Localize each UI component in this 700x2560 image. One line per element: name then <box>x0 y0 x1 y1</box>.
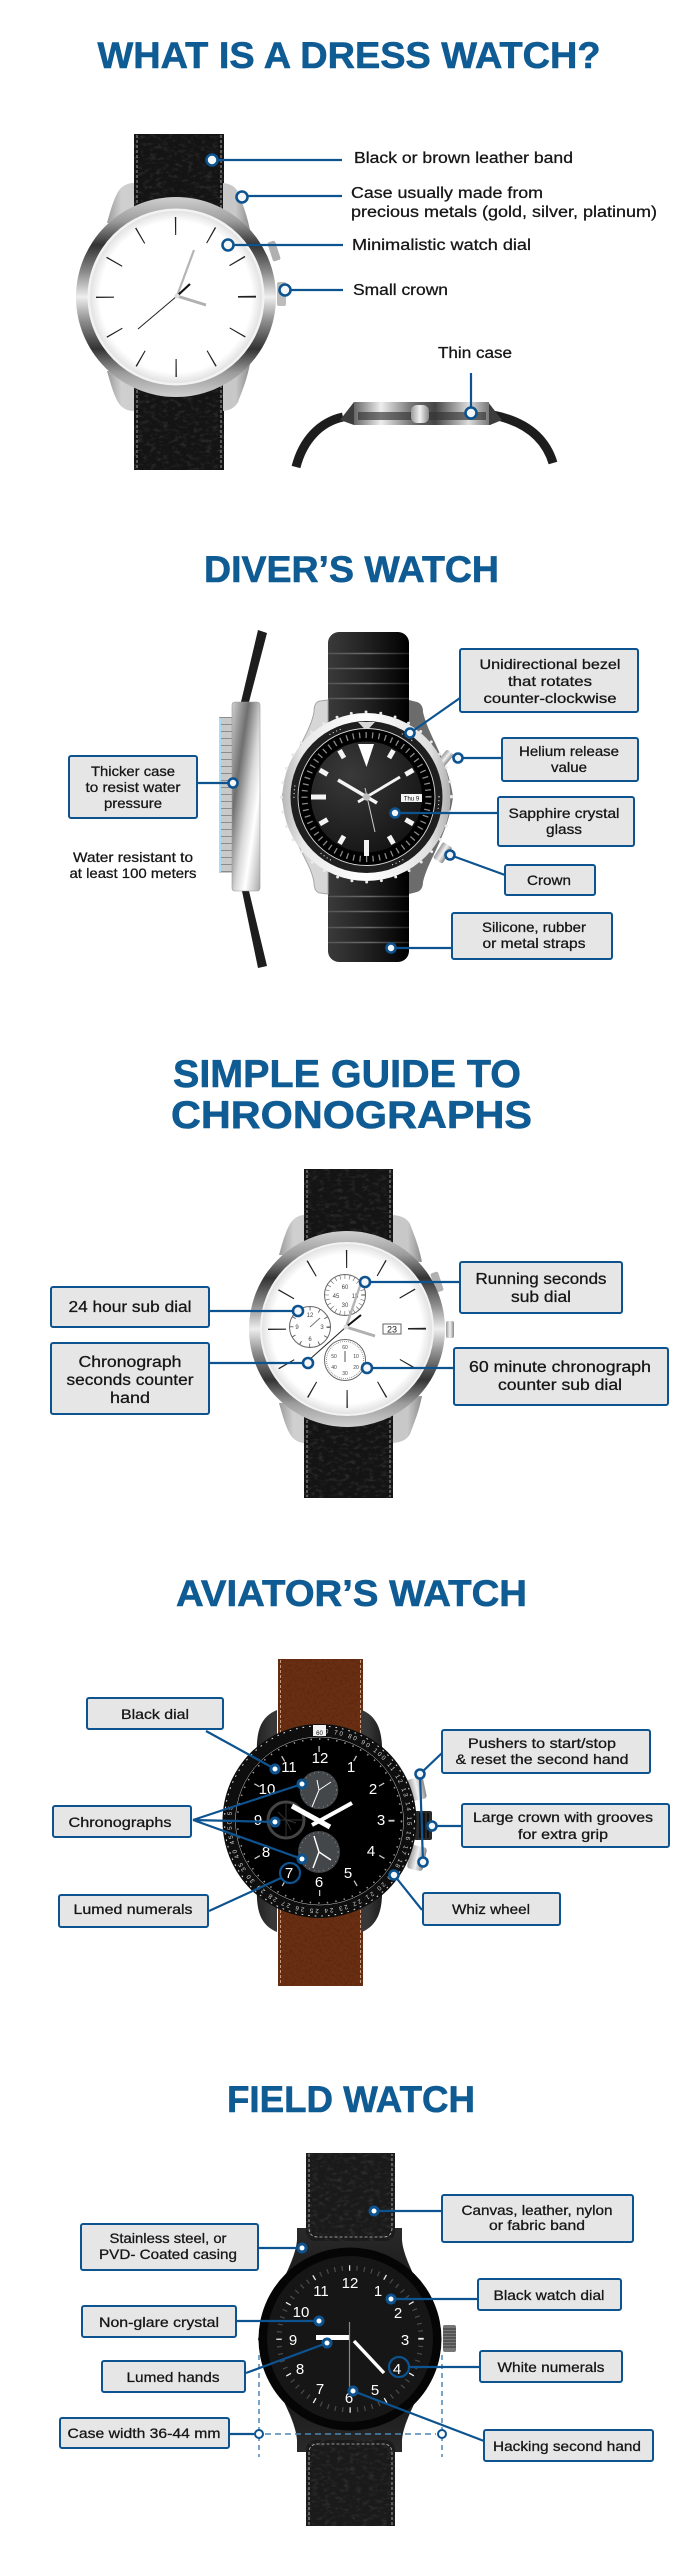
callout: running seconds sub dial: sub dial <box>511 1289 571 1306</box>
callout: 60 minute chronograph counter <box>362 1348 668 1405</box>
callout: unidirectional bezel <box>406 649 638 738</box>
illustration: dress watch side profile <box>296 402 553 467</box>
illustration: aviator watch: 3 <box>377 1812 385 1829</box>
panel: aviator's watch <box>52 1573 670 1986</box>
illustration: chronograph watch <box>249 1169 454 1498</box>
callout: 24 hour sub dial <box>51 1287 303 1327</box>
text: water resistance note: at least 100 meters <box>70 865 196 881</box>
illustration: aviator watch: 2 <box>369 1781 377 1798</box>
illustration: aviator watch: 6 <box>315 1874 323 1891</box>
callout: helium release <box>454 738 638 781</box>
callout: chronographs <box>53 1780 306 1863</box>
callout: unidirectional bezel: Unidirectional bezel <box>480 656 620 672</box>
illustration: chronograph watch: 45 <box>333 1294 340 1300</box>
callout: casing: Stainless steel, or <box>110 2230 227 2246</box>
panel: field watch <box>60 2079 653 2526</box>
illustration: aviator watch: 9 <box>254 1812 262 1829</box>
heading: simple guide to chronographs: SIMPLE GUIDE TO <box>173 1053 521 1096</box>
callout: running seconds sub dial <box>360 1262 622 1313</box>
illustration: chronograph watch: 15 <box>352 1294 359 1300</box>
illustration: dress watch front <box>76 134 286 470</box>
illustration: aviator watch: 7 <box>285 1865 293 1882</box>
callout: pushers <box>416 1730 650 1866</box>
measurement: case width guides <box>255 2355 446 2457</box>
illustration: field watch: 9 <box>289 2332 297 2349</box>
illustration: field watch: 10 <box>293 2304 309 2321</box>
callout: pushers: Pushers to start/stop <box>468 1735 616 1751</box>
illustration: aviator watch: 11 <box>281 1759 297 1776</box>
illustration: aviator watch: 60 70 80 90 100 11 12 13 14 15 16 17 18 19 20 21 22 23 24 25 26 27 28 29 30 35 40 45 50 55 <box>227 1729 412 1914</box>
illustration: chronograph watch: 20 <box>353 1365 359 1371</box>
callout: sapphire crystal <box>390 797 634 846</box>
illustration: field watch: 8 <box>296 2361 304 2378</box>
callout: whiz wheel <box>390 1870 560 1925</box>
callout: thin case: Thin case <box>438 345 512 362</box>
callout: whiz wheel: Whiz wheel <box>452 1901 530 1917</box>
callout: band material: or fabric band <box>489 2217 585 2233</box>
panel: dress watch <box>76 35 657 470</box>
illustration: chronograph watch: 10 <box>353 1354 359 1360</box>
callout: lumed hands: Lumed hands <box>126 2369 220 2385</box>
illustration: chronograph watch: 40 <box>331 1365 337 1371</box>
callout: unidirectional bezel: counter-clockwise <box>484 690 617 706</box>
illustration: field watch: 2 <box>394 2305 402 2322</box>
illustration: aviator watch: 4 <box>367 1843 375 1860</box>
callout: crown <box>446 850 595 895</box>
callout: case metals <box>236 185 657 221</box>
callout: white numerals <box>389 2351 622 2382</box>
callout: chronographs: Chronographs <box>68 1814 172 1830</box>
illustration: chronograph watch: 50 <box>331 1354 337 1360</box>
illustration: aviator watch: 8 <box>262 1844 270 1861</box>
callout: large crown <box>428 1804 669 1847</box>
callout: large crown: Large crown with grooves <box>473 1809 653 1825</box>
callout: hacking second hand <box>349 2387 653 2461</box>
callout: thicker case: Thicker case <box>91 763 175 779</box>
illustration: chronograph watch: 9 <box>295 1325 299 1331</box>
heading: aviator's watch: AVIATOR’S WATCH <box>176 1573 527 1614</box>
illustration: chronograph watch: 23 <box>387 1324 397 1334</box>
callout: chronograph seconds counter hand: hand <box>110 1390 150 1407</box>
callout: small crown <box>280 282 448 299</box>
callout: casing: PVD- Coated casing <box>99 2246 237 2262</box>
callout: black watch dial: Black watch dial <box>494 2287 604 2303</box>
illustration: chronograph watch: 60 <box>342 1285 349 1291</box>
callout: running seconds sub dial: Running seconds <box>476 1271 607 1288</box>
illustration: diver watch front <box>282 632 454 962</box>
callout: case width: Case width 36-44 mm <box>68 2425 220 2441</box>
callout: thicker case: pressure <box>104 795 162 811</box>
illustration: field watch: 5 <box>371 2382 379 2399</box>
callout: lumed numerals <box>59 1863 300 1927</box>
callout: chronograph seconds counter hand: seconds counter <box>66 1372 194 1389</box>
illustration: aviator watch: 1 <box>347 1759 355 1776</box>
callout: thin case <box>438 345 512 418</box>
callout: straps: Silicone, rubber <box>482 919 586 935</box>
illustration: field watch <box>258 2153 456 2526</box>
callout: non-glare crystal <box>82 2306 323 2337</box>
heading: simple guide to chronographs <box>171 1053 532 1137</box>
illustration: field watch: 7 <box>316 2381 324 2398</box>
callout: sapphire crystal: Sapphire crystal <box>508 805 620 821</box>
illustration: field watch: 11 <box>313 2283 329 2300</box>
callout: crown: Crown <box>527 872 571 888</box>
heading: diver's watch: DIVER’S WATCH <box>204 549 499 590</box>
callout: white numerals: White numerals <box>498 2359 604 2375</box>
callout: helium release: value <box>551 759 587 775</box>
heading: what is a dress watch: WHAT IS A DRESS WATCH? <box>98 35 600 76</box>
illustration: aviator watch <box>222 1659 432 1986</box>
illustration: field watch: 1 <box>374 2283 382 2300</box>
callout: straps <box>386 913 612 959</box>
illustration: chronograph watch: 12 <box>307 1313 314 1319</box>
panel: chronographs <box>51 1053 668 1498</box>
callout: 60 minute chronograph counter: counter sub dial <box>498 1377 622 1394</box>
callout: lumed numerals: Lumed numerals <box>74 1901 192 1917</box>
callout: case metals: Case usually made from <box>351 185 543 202</box>
callout: straps: or metal straps <box>482 935 586 951</box>
illustration: aviator watch: 10 <box>259 1781 275 1798</box>
callout: thicker case <box>69 756 238 818</box>
callout: 60 minute chronograph counter: 60 minute chronograph <box>469 1359 651 1376</box>
callout: black dial <box>87 1698 279 1773</box>
callout: sapphire crystal: glass <box>546 821 582 837</box>
illustration: diver watch side profile <box>219 630 267 968</box>
illustration: chronograph watch: 60 <box>342 1345 348 1351</box>
heading: field watch: FIELD WATCH <box>227 2079 475 2120</box>
text: water resistance note <box>70 849 196 881</box>
illustration: field watch: 6 <box>345 2390 353 2407</box>
callout: helium release: Helium release <box>519 743 619 759</box>
illustration: field watch: 4 <box>393 2361 401 2378</box>
callout: large crown: for extra grip <box>518 1826 608 1842</box>
callout: leather band: Black or brown leather band <box>354 150 573 167</box>
callout: black dial: Black dial <box>121 1706 189 1722</box>
callout: casing <box>81 2224 306 2270</box>
callout: band material: Canvas, leather, nylon <box>462 2202 612 2218</box>
illustration: aviator watch: 60 <box>316 1731 323 1737</box>
callout: lumed hands <box>102 2339 331 2392</box>
callout: watch dial <box>222 237 531 254</box>
illustration: chronograph watch: 30 <box>342 1303 349 1309</box>
illustration: aviator watch: 12 <box>312 1750 328 1767</box>
illustration: field watch: 12 <box>342 2275 358 2292</box>
callout: thicker case: to resist water <box>86 779 181 795</box>
callout: hacking second hand: Hacking second hand <box>493 2438 641 2454</box>
callout: chronograph seconds counter hand <box>51 1343 313 1414</box>
callout: leather band <box>206 150 573 167</box>
callout: unidirectional bezel: that rotates <box>508 673 592 689</box>
panel: diver's watch <box>69 549 638 968</box>
callout: case width <box>60 2418 254 2448</box>
callout: chronograph seconds counter hand: Chronograph <box>78 1354 182 1371</box>
illustration: field watch: 3 <box>401 2332 409 2349</box>
callout: pushers: & reset the second hand <box>456 1751 628 1767</box>
callout: small crown: Small crown <box>353 282 448 299</box>
callout: non-glare crystal: Non-glare crystal <box>99 2314 219 2330</box>
callout: case metals: precious metals (gold, silver, platinum) <box>351 204 657 221</box>
heading: simple guide to chronographs: CHRONOGRAPHS <box>171 1094 532 1137</box>
illustration: chronograph watch: 30 <box>342 1371 348 1377</box>
callout: black watch dial <box>387 2279 621 2310</box>
callout: 24 hour sub dial: 24 hour sub dial <box>68 1299 192 1316</box>
callout: watch dial: Minimalistic watch dial <box>352 237 531 254</box>
callout: band material <box>370 2195 633 2242</box>
text: water resistance note: Water resistant to <box>73 849 193 865</box>
illustration: chronograph watch: 6 <box>308 1337 312 1343</box>
illustration: chronograph watch: 3 <box>320 1325 324 1331</box>
illustration: aviator watch: 5 <box>344 1865 352 1882</box>
illustration: diver watch front: Thu 9 <box>404 796 420 802</box>
